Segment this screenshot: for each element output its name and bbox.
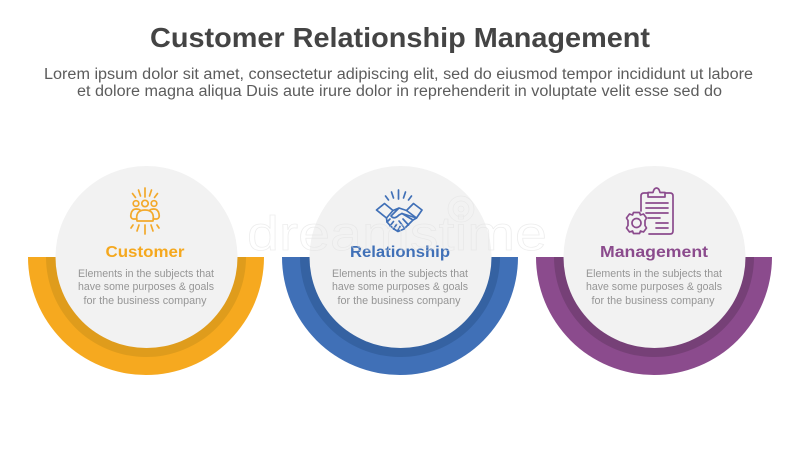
panel: relationship: [282, 166, 518, 375]
icon: clipboard and gear: [626, 188, 673, 234]
watermark: dreamstime: [247, 208, 547, 261]
subtitle text: et dolore magna aliqua Duis aute irure dolor in reprehenderit in voluptate velit esse sed do: [77, 83, 722, 100]
customer heading: Customer: [106, 244, 184, 261]
icon: handshake: [376, 190, 422, 232]
orange inner half ring: [46, 257, 246, 357]
management body text: for the business company: [592, 295, 715, 307]
management body text: [586, 268, 723, 307]
customer circle: [56, 166, 238, 348]
relationship body text: have some purposes & goals: [332, 281, 469, 293]
relationship body text: for the business company: [338, 295, 461, 307]
management heading: Management: [600, 244, 709, 261]
blue outer half ring: [282, 257, 518, 375]
panel: management: [536, 166, 772, 375]
panel: customer: [28, 166, 264, 375]
purple outer half ring: [536, 257, 772, 375]
relationship circle: [310, 166, 492, 348]
management body text: Elements in the subjects that: [586, 268, 722, 280]
watermark: [247, 196, 547, 261]
management body text: have some purposes & goals: [586, 281, 723, 293]
icon: people with rays: [131, 188, 159, 234]
subtitle text: Lorem ipsum dolor sit amet, consectetur adipiscing elit, sed do eiusmod tempor incididunt ut labore: [44, 66, 753, 83]
management circle: [564, 166, 746, 348]
blue inner half ring: [300, 257, 500, 357]
relationship body text: Elements in the subjects that: [332, 268, 468, 280]
title: Customer Relationship Management: [150, 22, 650, 53]
customer body text: Elements in the subjects that: [78, 268, 214, 280]
orange outer half ring: [28, 257, 264, 375]
customer body text: [78, 268, 215, 307]
subtitle text: [44, 66, 753, 100]
customer body text: for the business company: [84, 295, 207, 307]
purple inner half ring: [554, 257, 754, 357]
relationship body text: [332, 268, 469, 307]
relationship heading: Relationship: [350, 244, 450, 261]
customer body text: have some purposes & goals: [78, 281, 215, 293]
